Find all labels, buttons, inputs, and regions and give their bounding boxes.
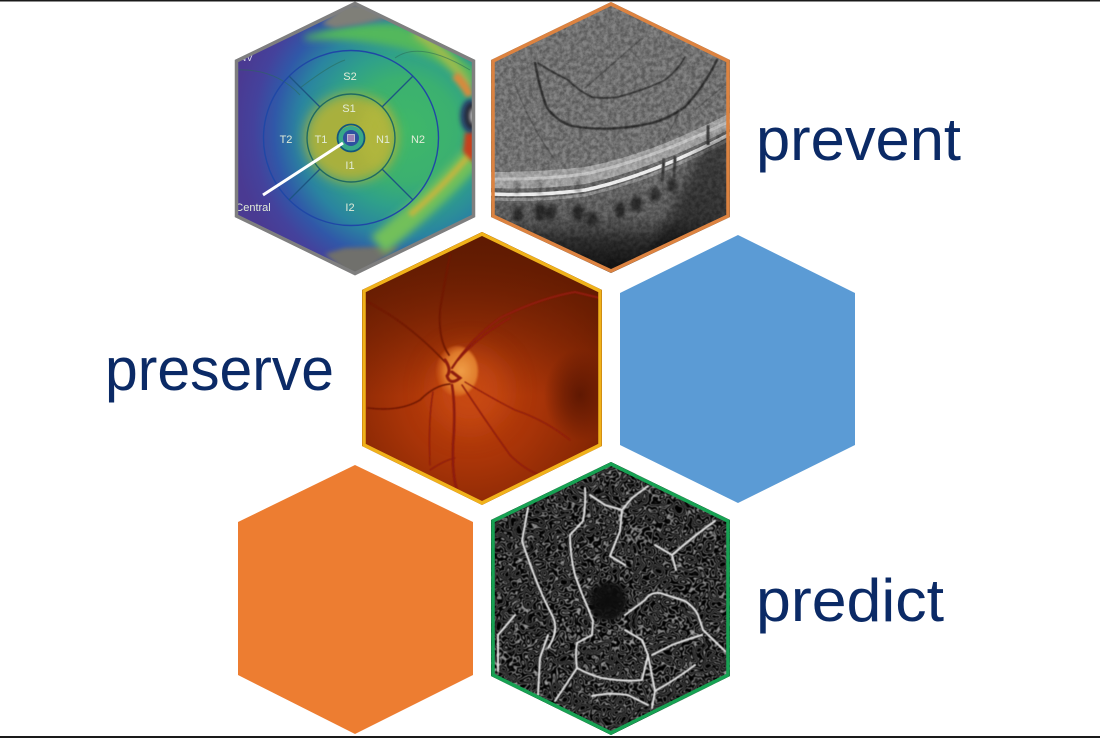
top edge line [0, 0, 1100, 2]
bottom edge line [0, 736, 1100, 738]
hexagon: retinal thickness map [235, 0, 480, 276]
label: preserve: preserve [105, 336, 334, 403]
hexagon: solid orange [238, 465, 473, 734]
label: prevent: prevent [756, 106, 961, 173]
hexagon: retinal thickness map: I1 [345, 160, 355, 172]
hexagon: retinal thickness map: T1 [315, 134, 327, 146]
hexagon: retinal thickness map: S2 [343, 71, 357, 83]
label: predict: predict [756, 567, 944, 634]
hexagon: OCT angiography [491, 460, 731, 737]
hexagon: retinal thickness map: N1 [376, 134, 390, 146]
hexagon: retinal thickness map: I2 [345, 202, 355, 214]
hexagon: retinal thickness map: Central [235, 202, 271, 214]
hexagon: fundus photograph [362, 230, 616, 507]
hexagon: retinal thickness map: S1 [342, 103, 356, 115]
hexagon: solid blue [620, 235, 855, 503]
hexagon: retinal thickness map: NV [239, 53, 253, 64]
hexagon: retinal thickness map: N2 [411, 134, 425, 146]
hexagon: retinal thickness map: T2 [280, 134, 292, 146]
hexagon: OCT scan [491, 0, 732, 280]
